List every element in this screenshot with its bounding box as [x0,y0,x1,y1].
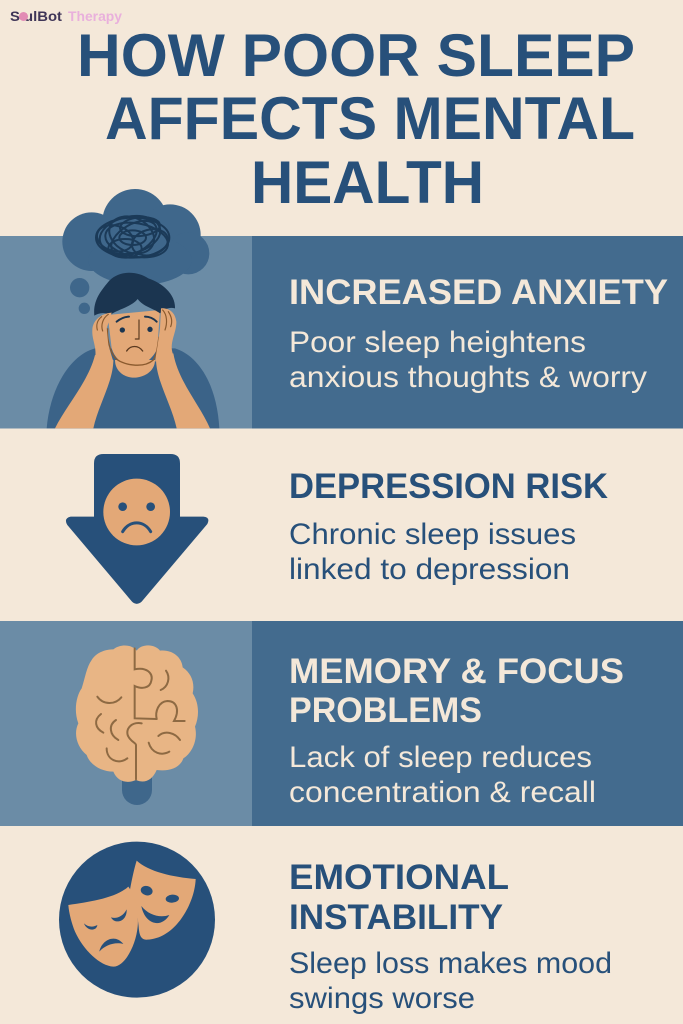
thought bubbles [70,278,89,297]
text: anxiety description: anxious thoughts & worry [289,361,647,394]
heading: emotional instability [289,858,509,937]
brain [76,645,198,782]
text: memory description [289,741,596,809]
panel: emotional instability [289,858,612,1015]
text: depression description: Chronic sleep issues [289,518,576,551]
brain folds and puzzle lines [96,648,185,779]
icon: thought cloud with scribble [62,189,209,285]
icon: worried person [47,273,219,428]
panel: memory and focus problems [0,621,683,826]
neck [115,360,155,378]
sad mask [68,887,138,967]
text: anxiety description [289,326,647,394]
icon: down arrow with sad face [66,454,208,604]
text: anxiety description: Poor sleep heightens [289,326,586,359]
heading: emotional instability: EMOTIONAL [289,858,509,897]
hands [92,313,113,362]
text: memory description: concentration & recall [289,776,596,809]
text: memory description: Lack of sleep reduces [289,741,592,774]
heading: depression risk: DEPRESSION RISK [289,467,608,506]
title: HEALTH [251,149,484,216]
arms [55,355,113,428]
face [108,310,160,366]
happy mask [129,861,196,940]
heading: memory and focus problems: MEMORY & FOCUS [289,652,624,691]
panel: increased anxiety [0,236,683,428]
panel: depression risk [289,467,608,586]
heading: memory and focus problems [289,652,624,730]
heading: increased anxiety: INCREASED ANXIETY [289,273,668,312]
facial features [117,317,157,351]
icon: brain puzzle [76,645,198,805]
text: instability description [289,947,612,1015]
heading: memory and focus problems: PROBLEMS [289,691,482,730]
logo: SoulBot Therapy: Therapy [68,8,122,24]
hair [94,273,175,316]
text: instability description: swings worse [289,982,475,1015]
title: HOW POOR SLEEP [77,22,635,89]
text: depression description [289,518,576,586]
logo: SoulBot Therapy [10,8,122,24]
title [77,22,635,216]
shoulders [47,348,219,428]
text: instability description: Sleep loss makes mood [289,947,612,980]
icon: theatre masks [59,842,215,998]
text: depression description: linked to depression [289,553,570,586]
logo: SoulBot Therapy: S ulBot [10,8,62,24]
brain stem [122,777,152,805]
title: AFFECTS MENTAL [105,85,635,152]
heading: emotional instability: INSTABILITY [289,898,503,937]
